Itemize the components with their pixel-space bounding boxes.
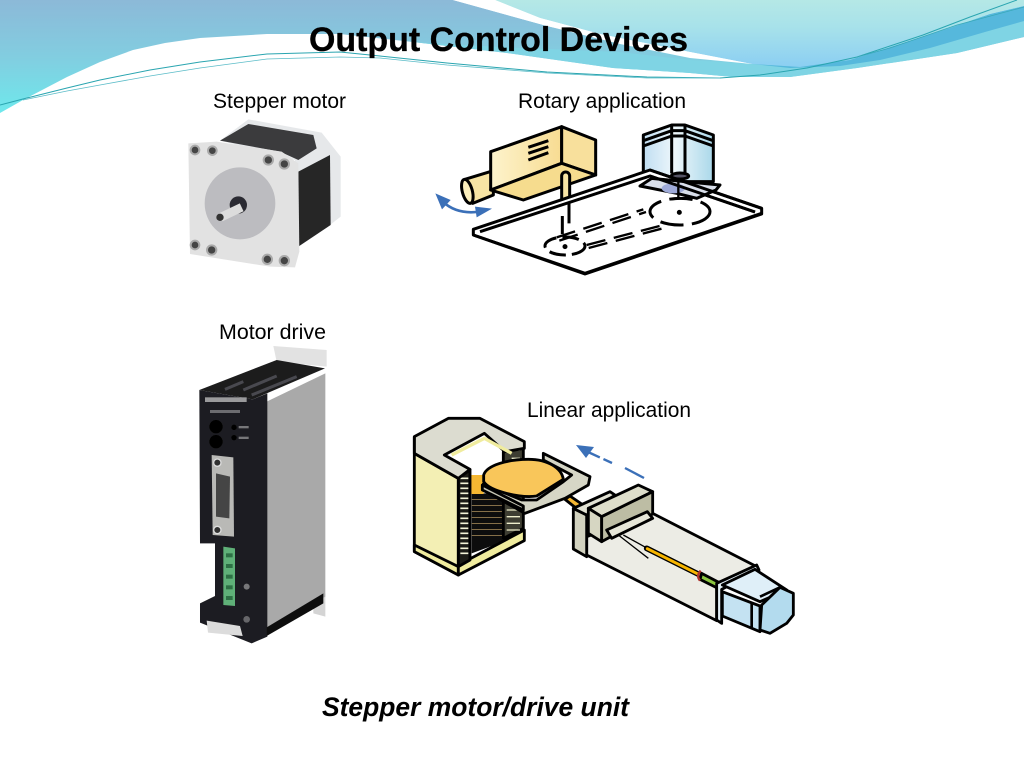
diagram: rotary application xyxy=(435,125,762,274)
rotation arrow xyxy=(435,193,492,217)
label: motor drive: Motor drive xyxy=(219,321,326,344)
transfer arrow xyxy=(576,445,644,478)
caption: Stepper motor/drive unit xyxy=(322,692,630,722)
motor flange xyxy=(640,170,762,212)
yellow camera head xyxy=(459,127,596,205)
photo: motor drive xyxy=(199,346,327,643)
linear actuator xyxy=(573,485,793,633)
label: linear application: Linear application xyxy=(527,399,691,422)
wafer fork and wafer xyxy=(482,453,590,513)
header wave background xyxy=(0,0,1024,113)
label: stepper motor: Stepper motor xyxy=(213,90,346,113)
wafer cassette frame xyxy=(414,418,524,575)
label: rotary application: Rotary application xyxy=(518,90,686,113)
table plate xyxy=(473,170,762,274)
photo: stepper motor xyxy=(188,119,341,267)
diagram: linear application xyxy=(414,418,793,633)
stepper motor, blue xyxy=(643,125,713,182)
title: Output Control Devices xyxy=(309,21,688,59)
